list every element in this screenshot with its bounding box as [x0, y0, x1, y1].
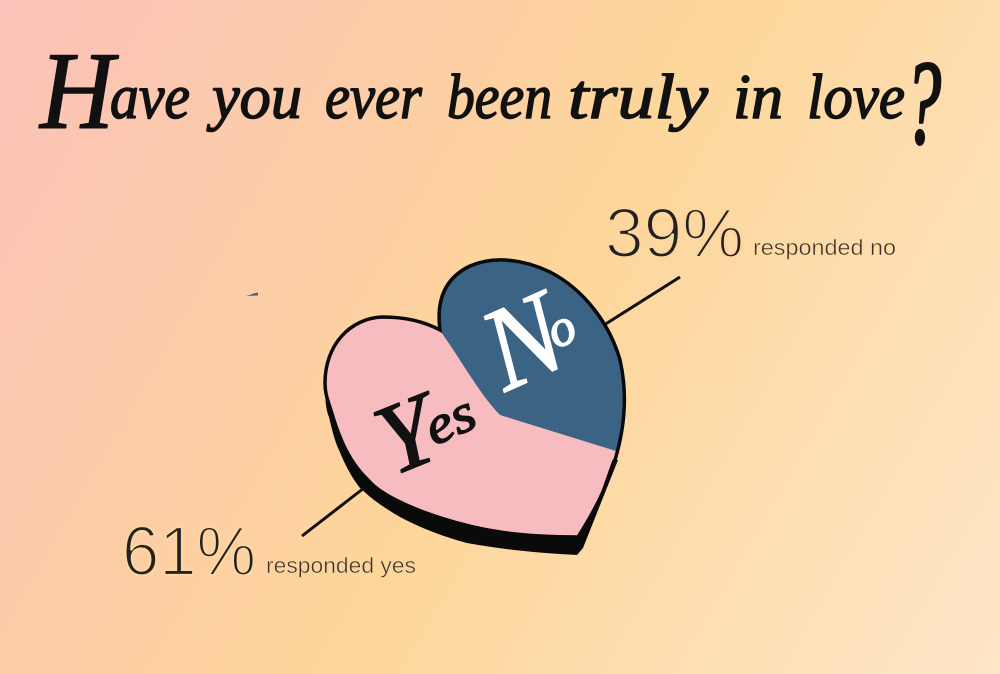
title: ?	[905, 36, 941, 169]
leader line: yes	[302, 488, 364, 536]
heart chart	[325, 260, 624, 555]
stray blue mark	[246, 292, 258, 296]
heart extruded shadow	[325, 383, 618, 555]
stat: 61% responded yes: 61%	[122, 512, 256, 590]
stat: 61% responded yes	[122, 512, 416, 590]
title: truly	[568, 61, 709, 132]
stat: 39% responded no: responded no	[753, 235, 896, 260]
title: in	[733, 61, 783, 132]
leader line: no	[604, 277, 680, 325]
title: been	[447, 61, 552, 132]
stat: 39% responded no	[605, 194, 896, 272]
label: Yes: es	[414, 382, 485, 457]
heart outline	[325, 260, 624, 537]
title: ave	[110, 61, 190, 132]
title: ever	[325, 61, 423, 132]
title: H	[38, 30, 119, 152]
stat: 61% responded yes: responded yes	[266, 553, 416, 578]
stat: 39% responded no: 39%	[605, 194, 744, 272]
label: No: N	[461, 264, 589, 416]
slice: yes 61%	[325, 317, 616, 537]
title: you	[206, 61, 302, 132]
title: love	[807, 61, 905, 132]
label: No: o	[538, 297, 585, 360]
label: Yes: Y	[360, 369, 462, 496]
slice: no 39%	[440, 260, 624, 451]
title	[38, 30, 941, 169]
